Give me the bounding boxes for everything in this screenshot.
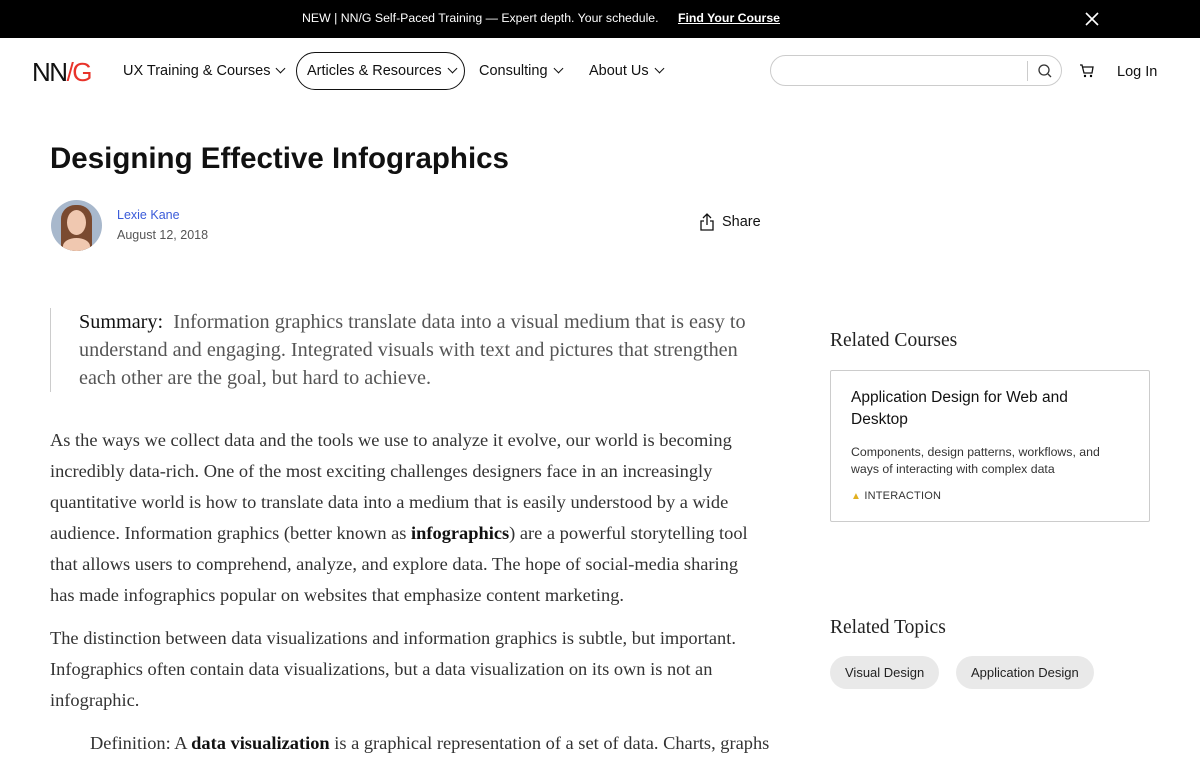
body paragraph 2: Infographics often contain data visualizations, but a data visualization on its own is not an <box>50 659 712 679</box>
summary: Summary: Information graphics translate data into a visual medium that is easy to <box>79 311 746 333</box>
related courses heading: Related Courses <box>830 330 957 351</box>
course card <box>830 370 1150 522</box>
login: Log In <box>1117 64 1157 80</box>
body paragraph 2 <box>50 628 736 710</box>
body paragraph 1: that allows users to comprehend, analyze, and explore data. The hope of social-media sharing <box>50 554 738 574</box>
nav bar: About Us <box>589 63 649 79</box>
nav bar: Consulting <box>479 63 548 79</box>
text: Application Design <box>971 665 1079 680</box>
summary <box>50 308 746 392</box>
tag: interaction: ▲ INTERACTION <box>851 490 941 502</box>
icon: cart <box>1080 64 1094 78</box>
course card: Application Design for Web and Desktop <box>851 389 1068 428</box>
body paragraph 1: As the ways we collect data and the tools we use to analyze it evolve, our world is becoming <box>50 430 732 450</box>
summary: each other are the goal, but hard to achieve. <box>79 367 431 389</box>
body paragraph 1 <box>50 430 748 605</box>
author block <box>51 200 208 251</box>
topic pills <box>830 656 939 689</box>
top banner <box>0 0 1200 38</box>
avatar <box>51 200 102 251</box>
summary: understand and engaging. Integrated visuals with text and pictures that strengthen <box>79 339 738 361</box>
course card: ways of interacting with complex data <box>851 462 1055 476</box>
body paragraph 2: infographic. <box>50 690 139 710</box>
search box <box>770 55 1062 86</box>
body paragraph 2: The distinction between data visualizations and information graphics is subtle, but important. <box>50 628 736 648</box>
author block: August 12, 2018 <box>117 228 208 242</box>
banner text: NEW | NN/G Self-Paced Training — Expert depth. Your schedule. Find Your Course <box>302 11 780 25</box>
nav bar <box>32 52 1157 90</box>
course card: Components, design patterns, workflows, and <box>851 445 1100 459</box>
definition: Definition: A data visualization is a graphical representation of a set of data. Charts, graphs <box>90 733 769 753</box>
nav links: UX Training & Courses <box>123 63 270 79</box>
body paragraph 1: has made infographics popular on websites that emphasize content marketing. <box>50 585 624 605</box>
title: Designing Effective Infographics <box>50 142 509 175</box>
topic pills: Visual Design <box>845 665 924 680</box>
related topics heading: Related Topics <box>830 617 946 638</box>
body paragraph 1: quantitative world is how to translate data into a medium that is easily understood by a wide <box>50 492 728 512</box>
author block: Lexie Kane <box>117 208 180 222</box>
nav bar: Articles & Resources <box>307 63 442 79</box>
share button: Share <box>722 214 761 230</box>
logo: NN/G <box>32 57 91 87</box>
share button <box>700 213 761 231</box>
body paragraph 1: audience. Information graphics (better known as infographics) are a powerful storytelling tool <box>50 523 748 543</box>
icon: close <box>1086 12 1098 26</box>
body paragraph 1: incredibly data-rich. One of the most exciting challenges designers face in an increasingly <box>50 461 712 481</box>
